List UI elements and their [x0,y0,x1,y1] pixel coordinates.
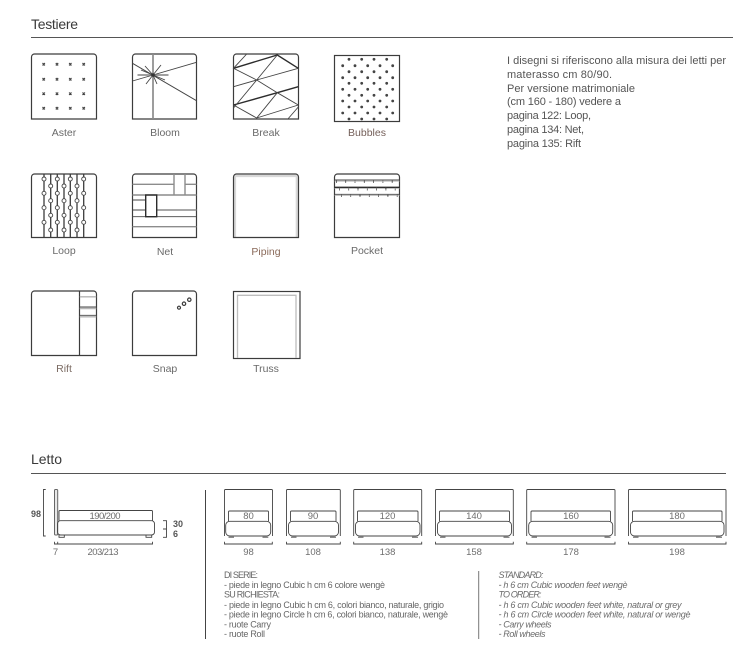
bed front 80: 80 [243,511,254,522]
side note: I disegni si riferiscono alla misura dei letti per [507,55,726,67]
bed front 180 [628,490,726,558]
label: Truss: Truss [253,363,279,375]
heading: Letto: Letto [31,451,62,467]
bed front 80 [224,490,272,558]
notes: English: TO ORDER: [498,590,542,600]
label: Bubbles: Bubbles [348,127,386,139]
side note: Per versione matrimoniale [507,83,635,95]
label: Net: Net [157,246,173,258]
bed front 80: 98 [243,547,254,558]
notes: Italian: - ruote Roll [224,629,265,639]
panel: Net [132,174,196,258]
panel: Snap [132,291,196,375]
divider: vertical left [204,490,206,639]
label: Pocket: Pocket [351,245,383,257]
bed side view: 30 [173,519,183,529]
panel: Aster [32,54,96,139]
side note: pagina 122: Loop, [507,110,591,122]
bed front 140 [436,490,513,558]
label: Snap: Snap [153,363,177,375]
bed front 90: 90 [308,511,318,522]
side note: pagina 135: Rift [507,138,581,150]
label: Break: Break [252,127,280,139]
notes: Italian: - piede in legno Cubic h cm 6 colore wengè [224,580,385,590]
side note: materasso cm 80/90. [507,69,612,81]
bed front 180: 180 [669,511,685,522]
bed front 180: 198 [669,547,685,558]
panel: Loop [32,174,96,257]
notes: Italian: - piede in legno Circle h cm 6, colori bianco, naturale, wengè [224,610,448,620]
bed front 140: 158 [466,547,482,558]
notes: Italian: - ruote Carry [224,620,272,630]
bed front 120 [354,490,422,558]
bed side view: 203/213 [88,547,118,558]
bed side view: 6 [173,529,178,539]
label: Rift: Rift [56,363,72,375]
side note: (cm 160 - 180) vedere a [507,96,622,108]
bed front 160: 178 [563,547,579,558]
bed side view: 7 [53,547,58,558]
notes: English: - Roll wheels [498,629,546,639]
notes: Italian [224,570,448,639]
panel: Rift [32,291,96,375]
bed front 90 [286,490,340,558]
notes: Italian: SU RICHIESTA: [224,590,280,600]
heading: Testiere: Testiere [31,16,78,32]
notes: English: - h 6 cm Cubic wooden feet wengè [498,580,628,590]
panel: Truss [234,292,300,375]
label: Bloom: Bloom [150,127,180,139]
bed side view [31,490,183,558]
side note [507,55,726,150]
label: Piping: Piping [251,246,281,258]
notes: English: STANDARD: [498,570,544,580]
notes: Italian: - piede in legno Cubic h cm 6, colori bianco, naturale, grigio [224,600,444,610]
notes: English: - h 6 cm Circle wooden feet white, natural or wengè [498,610,690,620]
label: Loop: Loop [52,245,76,257]
notes: English: - Carry wheels [498,620,552,630]
notes: Italian: DI SERIE: [224,570,258,580]
divider: vertical notes [478,571,480,639]
panel: Pocket [334,174,400,257]
bed front 140: 140 [466,511,482,522]
side note: pagina 134: Net, [507,124,584,136]
notes: English [498,570,690,639]
panel: Piping [234,174,298,258]
bed front 160: 160 [563,511,579,522]
label: Aster: Aster [52,127,77,139]
bed front 120: 138 [380,547,395,558]
panel: Break [234,54,298,139]
notes: English: - h 6 cm Cubic wooden feet white, natural or grey [498,600,682,610]
bed side view: 190/200 [90,511,120,522]
bed side view: 98 [31,509,41,519]
bed front 90: 108 [305,547,321,558]
bed front 160 [527,490,615,558]
bed front 120: 120 [380,511,395,522]
panel: Bubbles [334,56,400,139]
panel: Bloom [132,54,196,139]
